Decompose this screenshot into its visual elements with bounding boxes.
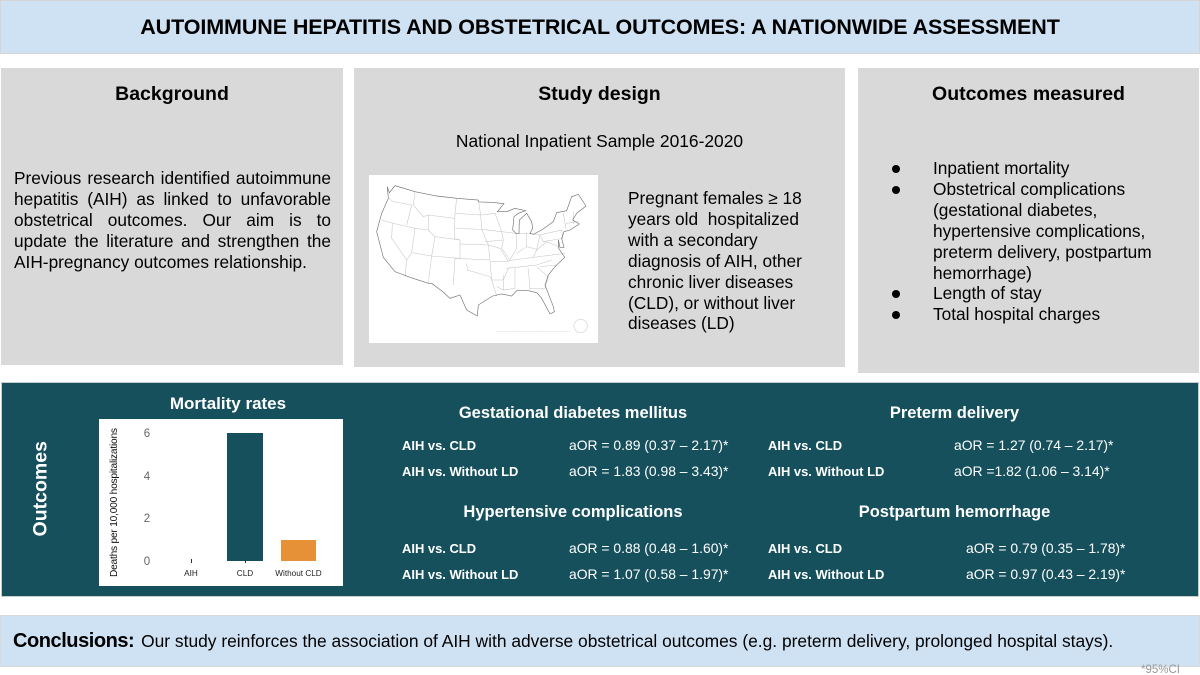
y axis labels: 2 (144, 513, 150, 525)
heading: mortality rates: Mortality rates (170, 394, 286, 413)
subheading: Postpartum hemorrhage (859, 503, 1050, 521)
title text: AUTOIMMUNE HEPATITIS AND OBSTETRICAL OUTCOMES: A NATIONWIDE ASSESSMENT (140, 15, 1060, 39)
subheading: Preterm delivery (890, 404, 1019, 422)
data source text: National Inpatient Sample 2016-2020 (456, 131, 743, 151)
heading: outcomes measured: Outcomes measured (932, 83, 1125, 105)
map of the United States (369, 175, 598, 343)
comparison rows (402, 540, 728, 582)
result group: gestational diabetes mellitus (402, 404, 728, 479)
comparison rows: AIH vs. CLD (768, 541, 842, 556)
comparison rows: AIH vs. Without LD (768, 567, 884, 582)
y axis labels (144, 428, 151, 568)
comparison rows: aOR = 0.97 (0.43 – 2.19)* (966, 566, 1125, 582)
background text: AIH-pregnancy outcomes relationship. (14, 252, 307, 272)
outcomes list (892, 158, 1152, 324)
background text: update the literature and strengthen the (14, 231, 331, 251)
study population text: Pregnant females ≥ 18 (628, 188, 802, 208)
bullet (892, 290, 900, 298)
result group: preterm delivery (768, 404, 1114, 479)
bullet (892, 186, 900, 194)
comparison rows (768, 437, 1114, 479)
comparison rows: aOR = 0.79 (0.35 – 1.78)* (966, 540, 1125, 556)
background text: hepatitis (AIH) as linked to unfavorable (14, 189, 331, 209)
study population text: with a secondary (628, 230, 758, 250)
comparison rows: aOR = 1.07 (0.58 – 1.97)* (569, 566, 728, 582)
panel: outcomes results (1, 382, 1199, 597)
outcomes list: Length of stay (933, 283, 1042, 303)
y axis title: Deaths per 10,000 hospitalizations (109, 428, 120, 577)
study population text (628, 188, 802, 333)
background text: obstetrical outcomes. Our aim is to (14, 210, 331, 230)
study population text: chronic liver diseases (628, 272, 793, 292)
study population text: (CLD), or without liver (628, 293, 795, 313)
y axis labels: 4 (144, 471, 151, 483)
comparison rows: AIH vs. Without LD (768, 464, 884, 479)
comparison rows: AIH vs. CLD (768, 438, 842, 453)
comparison rows: AIH vs. CLD (402, 438, 476, 453)
comparison rows: AIH vs. Without LD (402, 567, 518, 582)
comparison rows: aOR =1.82 (1.06 – 3.14)* (954, 463, 1110, 479)
outcomes list: hypertensive complications, (933, 221, 1145, 241)
comparison rows (402, 437, 728, 479)
y axis labels: 6 (144, 428, 150, 440)
subheading: Gestational diabetes mellitus (459, 404, 687, 422)
bar: without CLD (281, 540, 316, 561)
y axis labels: 0 (144, 556, 150, 568)
bullet (892, 165, 900, 173)
study population text: diseases (LD) (628, 313, 735, 333)
panel: outcomes measured (858, 68, 1199, 373)
outcomes list: (gestational diabetes, (933, 200, 1097, 220)
comparison rows: AIH vs. CLD (402, 541, 476, 556)
comparison rows (768, 540, 1126, 582)
outcomes list: hemorrhage) (933, 263, 1032, 283)
outcomes list: Obstetrical complications (933, 179, 1125, 199)
map credit mark (497, 319, 587, 333)
panel: background (1, 68, 343, 365)
comparison rows: aOR = 0.88 (0.48 – 1.60)* (569, 540, 728, 556)
study population text: diagnosis of AIH, other (628, 251, 802, 271)
result group: hypertensive complications (402, 503, 728, 582)
background text (14, 168, 331, 272)
subheading: Hypertensive complications (463, 503, 683, 521)
study population text: years old hospitalized (628, 209, 799, 229)
x axis ticks and labels: CLD (237, 569, 253, 578)
bar: CLD (227, 433, 263, 561)
comparison rows: aOR = 0.89 (0.37 – 2.17)* (569, 437, 728, 453)
comparison rows: aOR = 1.83 (0.98 – 3.43)* (569, 463, 728, 479)
background text: Previous research identified autoimmune (14, 168, 331, 188)
panel: study design (354, 68, 845, 367)
x axis ticks and labels (184, 559, 322, 578)
conclusions text: Conclusions: Our study reinforces the association of AIH with adverse obstetrical outcomes (e.g. preterm delivery, prolonged hospital stays). (13, 630, 1113, 652)
bar chart: mortality rates (99, 419, 343, 586)
x axis ticks and labels: Without CLD (275, 569, 322, 578)
x axis ticks and labels: AIH (184, 569, 198, 578)
comparison rows: aOR = 1.27 (0.74 – 2.17)* (954, 437, 1113, 453)
result group: postpartum hemorrhage (768, 503, 1126, 582)
outcomes list: Inpatient mortality (933, 158, 1069, 178)
bullet (892, 311, 900, 319)
outcomes list: preterm delivery, postpartum (933, 242, 1152, 262)
vertical outcomes label: Outcomes (29, 441, 51, 536)
heading: study design: Study design (538, 83, 661, 105)
conclusions banner (0, 615, 1200, 667)
title banner (0, 0, 1200, 54)
outcomes list: Total hospital charges (933, 304, 1100, 324)
comparison rows: AIH vs. Without LD (402, 464, 518, 479)
heading: background: Background (115, 83, 229, 105)
